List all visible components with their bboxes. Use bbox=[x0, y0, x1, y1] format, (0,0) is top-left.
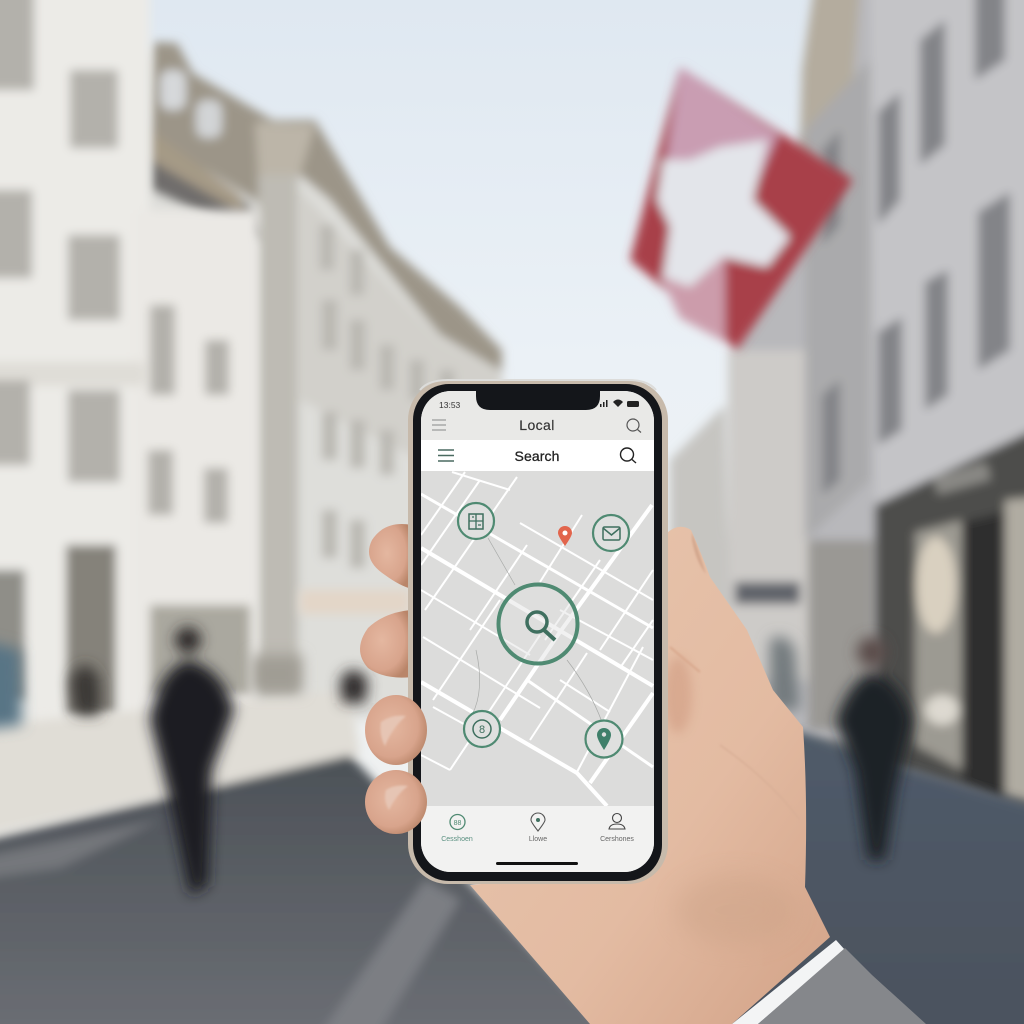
title: Local: Local bbox=[519, 417, 555, 433]
hand: finger third with nail bbox=[365, 695, 427, 765]
shirt cuff bbox=[732, 940, 845, 1024]
phone: black bezel bbox=[413, 384, 662, 881]
background: middle building bbox=[140, 42, 506, 720]
nav item: Llowe: Llowe bbox=[529, 836, 547, 843]
nav item: Cershones bbox=[600, 814, 634, 843]
nav item: Cesshoen bbox=[441, 814, 473, 843]
icon: menu bbox=[438, 450, 454, 461]
nav item: Cesshoen: Cesshoen bbox=[441, 836, 473, 843]
phone: screen bbox=[421, 391, 654, 872]
suit sleeve bbox=[758, 948, 926, 1024]
phone: metal frame bbox=[408, 380, 668, 884]
search bar bbox=[421, 440, 654, 471]
hand: finger top bbox=[369, 524, 412, 589]
background: street and sidewalk bbox=[0, 690, 1024, 1024]
hand: finger second bbox=[360, 610, 412, 678]
hand: palm and thumb bbox=[470, 527, 830, 1024]
hand: finger fourth with nail bbox=[365, 770, 427, 834]
phone: top frame highlight bbox=[420, 380, 656, 390]
background: backdrop behind distant street bbox=[660, 600, 1024, 830]
status icons bbox=[600, 400, 639, 407]
phone: notch bbox=[476, 390, 600, 410]
map marker: mail bbox=[593, 515, 629, 551]
icon: search bbox=[620, 448, 636, 463]
status and title bar bbox=[421, 391, 654, 440]
map marker: building bbox=[458, 503, 494, 539]
map marker: location bbox=[586, 720, 622, 758]
nav item: Cesshoen: 88 bbox=[454, 820, 461, 827]
map marker: contact: 8 bbox=[479, 724, 485, 736]
background: left white buildings bbox=[0, 0, 410, 740]
phone bbox=[408, 380, 668, 884]
central search marker bbox=[498, 584, 578, 664]
bottom navigation bar bbox=[421, 842, 654, 872]
background: right buildings bbox=[670, 0, 1024, 820]
status time: 13:53 bbox=[439, 400, 461, 410]
background: blurred pedestrians bbox=[0, 627, 912, 895]
background: Swiss flag bbox=[630, 67, 853, 350]
nav item: Llowe bbox=[529, 813, 547, 843]
home indicator bbox=[496, 862, 578, 865]
map pin: red bbox=[558, 526, 572, 546]
icon: grey search bbox=[627, 419, 641, 432]
map marker: contact bbox=[464, 711, 500, 747]
icon: grey menu bbox=[432, 420, 446, 430]
nav item: Cershones: Cershones bbox=[600, 836, 634, 843]
label: Search: Search bbox=[515, 448, 559, 464]
map bbox=[421, 471, 654, 806]
